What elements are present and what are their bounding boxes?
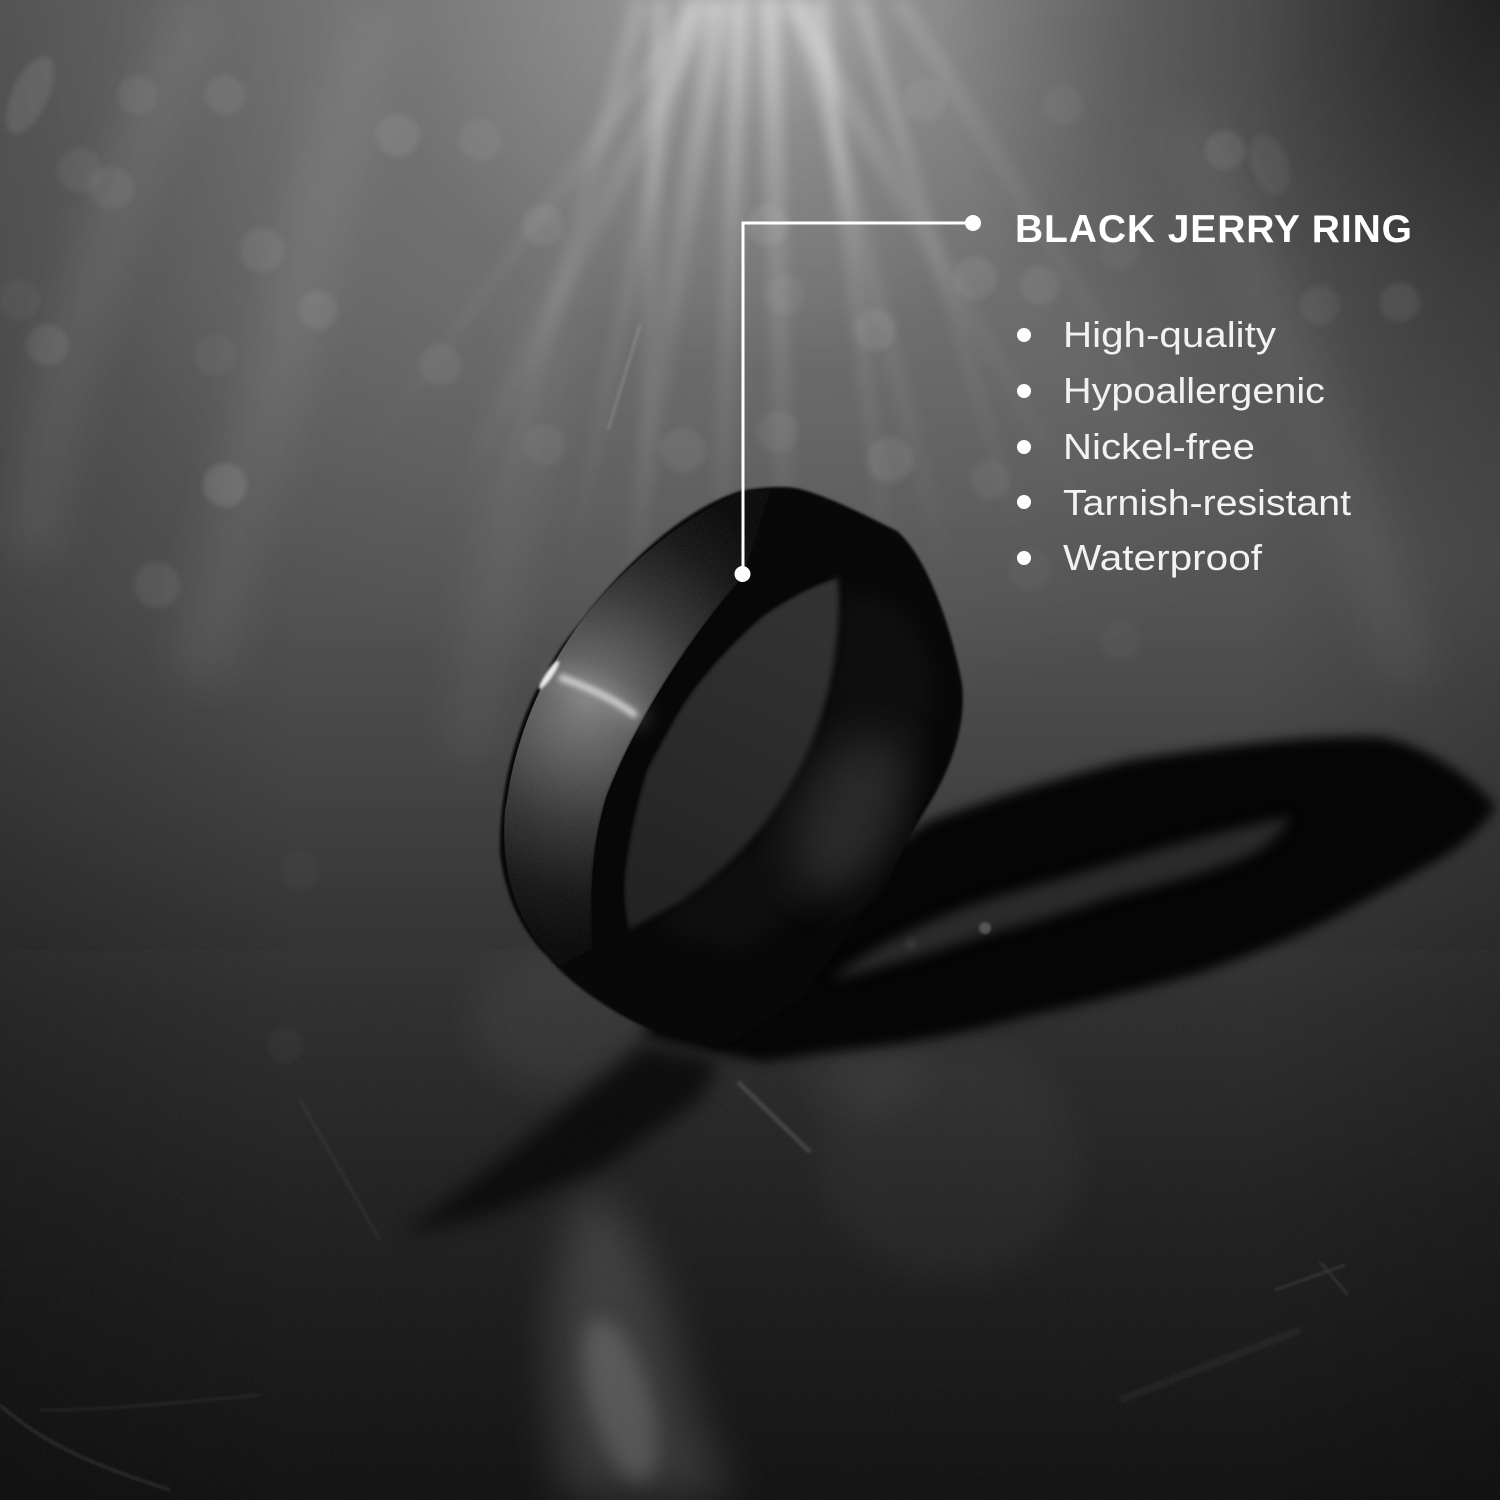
- feature list: High-quality: [1063, 314, 1276, 355]
- floor reflections and streaks: [470, 950, 1080, 1500]
- dark streak leading away from the ring: [402, 1045, 720, 1235]
- inner wall base tone: [660, 595, 931, 950]
- feature list: [1017, 314, 1351, 578]
- feature list: Nickel-free: [1063, 426, 1255, 467]
- light rays from the top: [30, 0, 1410, 800]
- band highlight: [562, 678, 634, 714]
- title: BLACK JERRY RING: [1015, 208, 1412, 251]
- feature list: Tarnish-resistant: [1063, 482, 1351, 523]
- lit sliver inside the shadow: [831, 817, 1291, 980]
- brushed grain on the band: [504, 490, 770, 965]
- feature list: Waterproof: [1063, 537, 1263, 578]
- edge glint: [536, 659, 562, 691]
- connector start dot: [965, 215, 981, 231]
- band inner chamfer: [591, 570, 838, 975]
- inner wall soft reflection: [788, 732, 916, 902]
- ring silhouette: [500, 487, 963, 1050]
- brushed outer band: [504, 490, 770, 965]
- bokeh light spots: [0, 49, 1420, 1063]
- feature list: Hypoallergenic: [1063, 370, 1325, 411]
- band highlight glow: [558, 677, 636, 716]
- connector end dot on ring: [734, 566, 750, 582]
- surface grain: [0, 950, 1500, 1500]
- black ring: [500, 487, 963, 1050]
- wide soft streaks: [30, 0, 1410, 760]
- ring hole: [623, 577, 839, 930]
- surface scratches: [0, 1082, 1348, 1490]
- ring cast shadow: [402, 737, 1496, 1235]
- callout connector line: [734, 215, 981, 582]
